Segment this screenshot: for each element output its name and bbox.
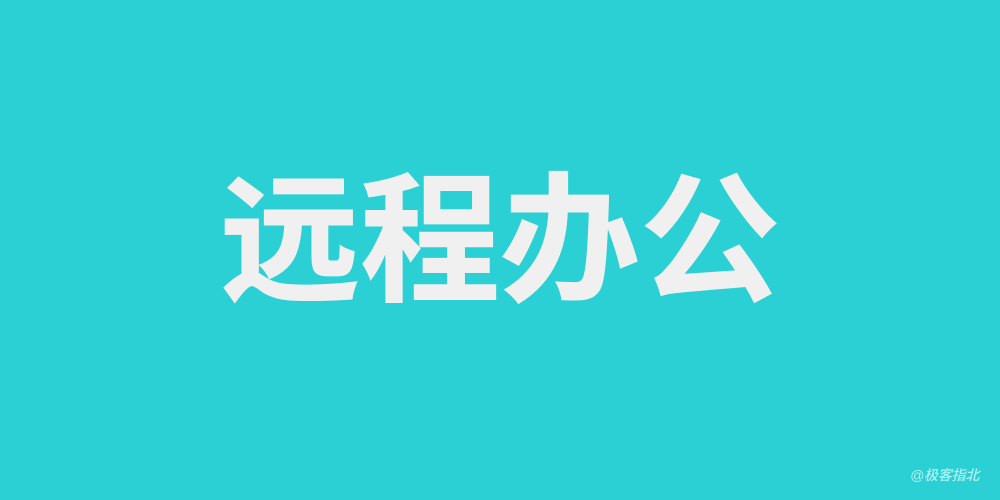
title: 远程办公 [220,163,780,320]
watermark: @极客指北 [910,467,979,483]
